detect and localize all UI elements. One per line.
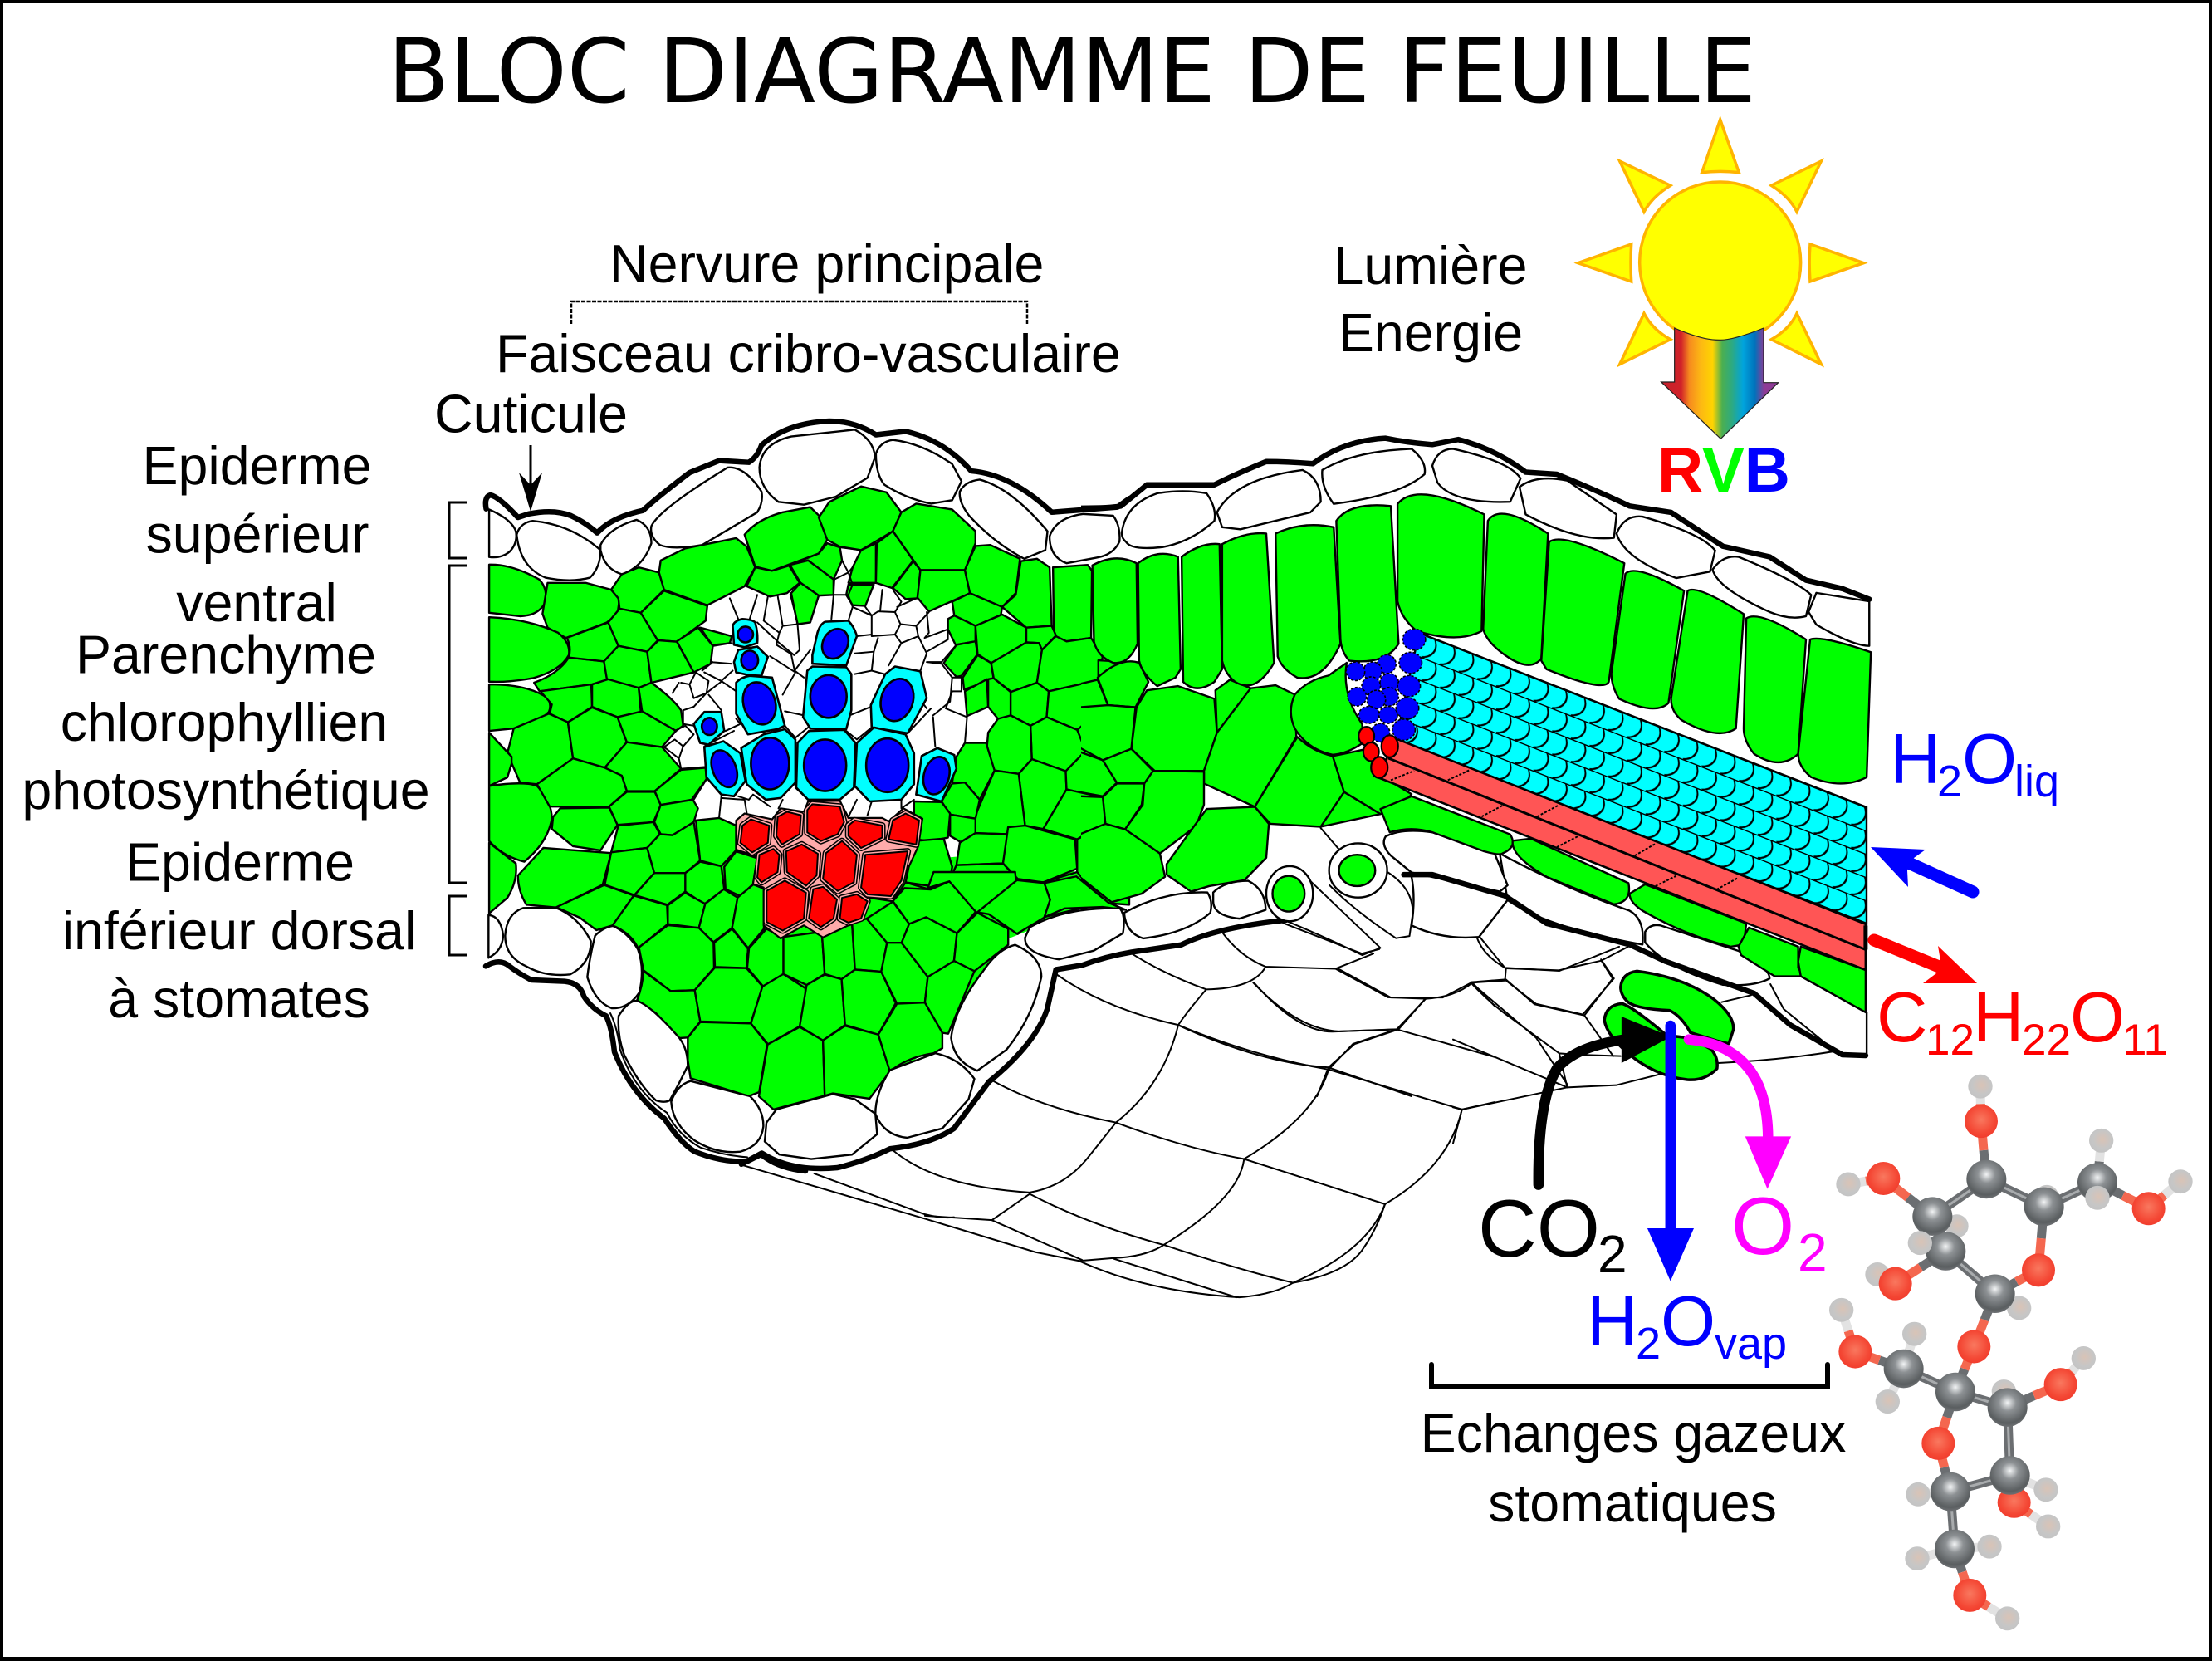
mesophyll: midrib green cells <box>489 487 1129 934</box>
mesophyll: lower midrib green cells <box>556 872 1126 1110</box>
arrow: CO2 <box>1539 1017 1671 1185</box>
label: H2O vapour: vap <box>1715 1319 1787 1369</box>
label: parenchyme chlorophyllien photosynthetique <box>22 625 430 821</box>
label: sucrose formula: 11 <box>2122 1016 2168 1065</box>
arrow: H2O vapour <box>1647 1026 1694 1281</box>
green lower cells <box>1380 796 1866 1012</box>
label: epiderme superieur ventral: Epiderme <box>142 436 372 496</box>
label: parenchyme chlorophyllien photosynthetique: Parenchyme <box>76 625 376 684</box>
label: H2O liquid: 2 <box>1937 757 1962 806</box>
label: epiderme inferieur dorsal a stomates: inférieur dorsal <box>62 901 416 961</box>
icon: sun <box>1578 120 1863 439</box>
label: lumiere energie: Energie <box>1338 303 1523 363</box>
oxygen atoms <box>1838 1105 2166 1612</box>
label: epiderme superieur ventral: ventral <box>176 573 337 633</box>
label: H2O vapour: H <box>1587 1282 1637 1361</box>
icon: rainbow arrow <box>1661 328 1779 439</box>
arrow: sucrose out <box>1874 940 1977 983</box>
lower cuticle <box>1404 875 1866 1056</box>
label: epiderme inferieur dorsal a stomates: Epiderme <box>125 832 355 892</box>
label: sucrose formula: 22 <box>2022 1016 2071 1065</box>
lower leaf surface network <box>741 923 1834 1297</box>
arrow: O2 <box>1689 1040 1791 1189</box>
stomate: guard cells and gas arrows <box>1539 971 1791 1281</box>
stomata side view <box>1266 843 1387 921</box>
xylem vessels <box>694 619 957 801</box>
label: sucrose formula: C <box>1877 978 1927 1057</box>
right cut edge <box>1866 1012 1867 1056</box>
label: cuticule: Cuticule <box>434 384 628 443</box>
label: epiderme inferieur dorsal a stomates <box>62 832 416 1029</box>
upper epidermis cells <box>1122 448 1869 646</box>
bracket: gas exchange <box>1431 1365 1828 1386</box>
spongy mesophyll cells <box>1079 661 1412 902</box>
leaf blade: palisade and spongy cells <box>1079 439 1871 1056</box>
label: nervure principale: Nervure principale <box>609 234 1044 294</box>
cuticle: upper midrib <box>486 421 1129 533</box>
vascular bundle: cyan xylem tubes <box>1396 633 1867 924</box>
bundle ends: red tube mouths <box>1358 727 1398 778</box>
label: CO2: 2 <box>1598 1224 1627 1284</box>
vascular bundle: salmon phloem bands <box>1346 629 1866 970</box>
label: RVB: RVB <box>1657 435 1790 506</box>
label: faisceau cribro-vasculaire: Faisceau cribro-vasculaire <box>496 324 1121 384</box>
brackets: leaf layers <box>449 502 467 955</box>
xylem parenchyma: white cell walls <box>664 547 967 821</box>
stomata chloroplasts <box>1272 855 1375 912</box>
label: gas exchange <box>1421 1404 1846 1533</box>
stomata walls <box>1282 828 1412 955</box>
arrow: cuticule <box>519 445 542 512</box>
palisade cells <box>1093 494 1871 783</box>
hydrogen atoms <box>1829 1075 2193 1630</box>
upper epidermis: midrib white cells <box>489 429 1119 581</box>
phloem: red sieve cells <box>737 801 922 938</box>
guard cells <box>1604 971 1734 1080</box>
label: CO2: CO <box>1478 1183 1600 1274</box>
label: sucrose formula: 12 <box>1926 1016 1975 1065</box>
arrow: H2O liquid in <box>1871 847 1973 892</box>
label: epiderme superieur ventral: supérieur <box>146 505 369 565</box>
label: O2: 2 <box>1798 1222 1828 1282</box>
label: H2O vapour: O <box>1661 1282 1715 1361</box>
label: H2O liquid: liq <box>2014 757 2059 806</box>
sucrose molecule <box>1829 1075 2193 1630</box>
label: epiderme superieur ventral <box>142 436 372 633</box>
label: parenchyme chlorophyllien photosynthetique: photosynthétique <box>22 761 430 821</box>
upper cuticle <box>1079 439 1869 600</box>
hydrogen atoms in front <box>1908 1186 2110 1255</box>
label: O2: O <box>1731 1180 1794 1271</box>
bundle ends: blue tube mouths <box>1346 629 1426 742</box>
label: sucrose formula: O <box>2070 978 2125 1057</box>
mesophyll: green backing under midrib <box>621 846 1079 1100</box>
bracket: nervure principale <box>571 301 1027 324</box>
cuticle: lower midrib <box>486 920 1286 1171</box>
lower epidermis cells <box>1384 830 1769 985</box>
label: epiderme inferieur dorsal a stomates: à stomates <box>108 969 370 1029</box>
carbon atoms <box>1884 1160 2117 1568</box>
label: H2O liquid: O <box>1962 720 2017 799</box>
label: lumiere energie <box>1334 236 1528 363</box>
title: BLOC DIAGRAMME DE FEUILLE <box>388 21 1756 124</box>
lower epidermis: white cells <box>488 881 1265 1159</box>
label: lumiere energie: Lumière <box>1334 236 1528 296</box>
label: H2O vapour: 2 <box>1636 1319 1661 1369</box>
label: gas exchange: stomatiques <box>1488 1473 1777 1533</box>
label: H2O liquid: H <box>1890 720 1940 799</box>
label: gas exchange: Echanges gazeux <box>1421 1404 1846 1463</box>
label: sucrose formula: H <box>1973 978 2024 1057</box>
label: parenchyme chlorophyllien photosynthetique: chlorophyllien <box>61 693 388 752</box>
